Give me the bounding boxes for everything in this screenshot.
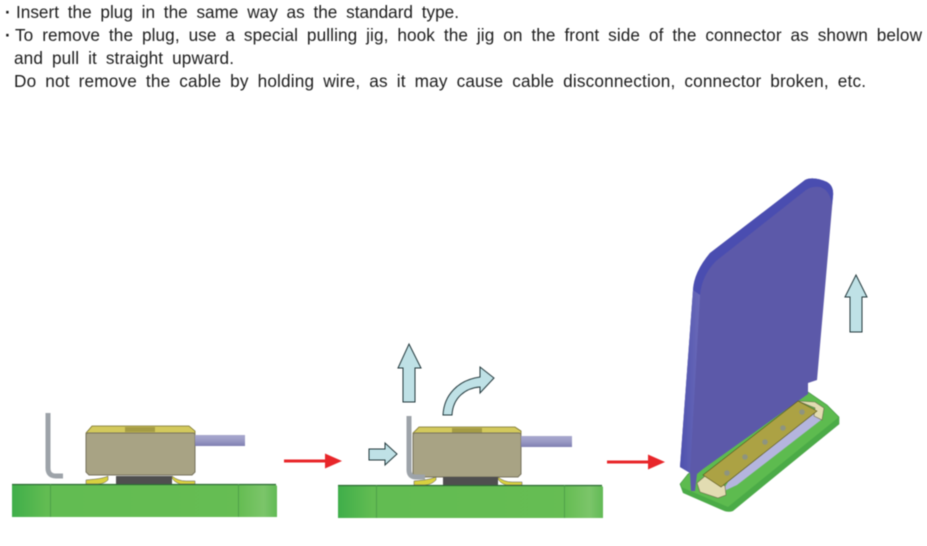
board bbox=[338, 485, 603, 518]
arrow: push sideways bbox=[369, 443, 397, 465]
cable bbox=[521, 436, 572, 447]
arrow: pull up bbox=[845, 275, 867, 332]
instruction text bbox=[5, 2, 923, 91]
plate top rim bbox=[693, 178, 833, 300]
red arrow 1 bbox=[284, 454, 342, 468]
arrow: pull up bbox=[398, 344, 421, 402]
connector top centre bbox=[452, 428, 482, 433]
connector feet bbox=[86, 476, 195, 484]
connector base bbox=[443, 477, 498, 485]
board bbox=[680, 392, 839, 511]
connector ends bbox=[697, 401, 824, 498]
board edge bbox=[681, 417, 839, 512]
step 3: cable pulled up from connector bbox=[680, 178, 867, 512]
step 2: jig hooked on connector bbox=[338, 344, 603, 518]
flexible cable lane bbox=[722, 410, 821, 492]
cable bbox=[195, 435, 245, 446]
connector feet bbox=[414, 477, 522, 485]
connector dots bbox=[724, 409, 805, 476]
cable plate bbox=[680, 178, 833, 491]
line 4: Do not remove the cable by holding wire, as it may cause cable disconnection, connector broken, etc. bbox=[14, 71, 866, 91]
line 2: · bbox=[5, 25, 11, 45]
connector body bbox=[413, 433, 521, 477]
connector top bbox=[413, 427, 521, 434]
red arrow 2 bbox=[607, 454, 665, 470]
line 2: To remove the plug, use a special pulling jig, hook the jig on the front side of the connector as shown below bbox=[15, 25, 923, 45]
line 1: Insert the plug in the same way as the standard type. bbox=[16, 2, 459, 22]
plate left rim bbox=[680, 290, 700, 473]
connector base bbox=[116, 476, 172, 484]
line 1: · bbox=[5, 2, 11, 22]
connector top bbox=[86, 426, 195, 434]
step 1: jig beside connector on board bbox=[12, 413, 277, 517]
connector body bbox=[86, 433, 195, 475]
connector top bbox=[703, 401, 817, 487]
icon: pulling jig bbox=[409, 416, 425, 477]
connector top centre bbox=[125, 427, 155, 432]
board bbox=[12, 484, 277, 517]
line 3: and pull it straight upward. bbox=[14, 48, 234, 68]
icon: pulling jig bbox=[48, 413, 63, 476]
arrow: rotate bbox=[443, 367, 494, 415]
